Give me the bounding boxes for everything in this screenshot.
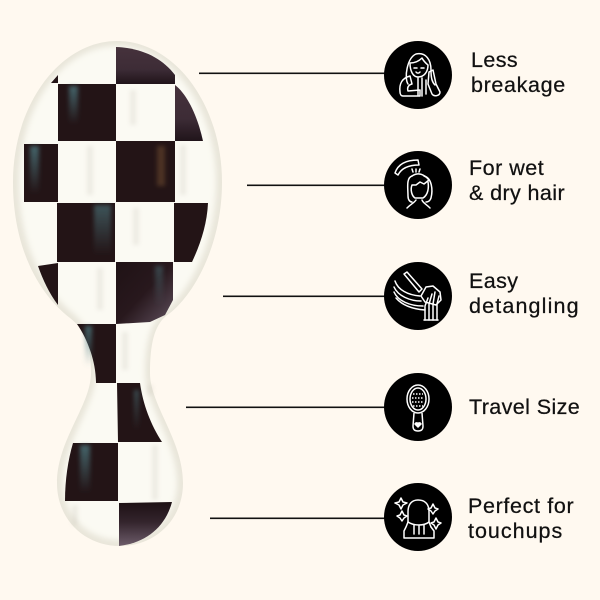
icon: woman brushing hair [384, 41, 452, 109]
connector line: wet and dry hair [247, 184, 386, 186]
label: Perfect for touchups: touchups [468, 519, 563, 543]
icon: shower over hair [384, 151, 452, 219]
connector line: travel size [186, 406, 386, 408]
icon: detangling hair [384, 262, 452, 330]
label: For wet & dry hair: For wet [469, 156, 544, 180]
hair brush illustration [13, 41, 222, 546]
label: Perfect for touchups: Perfect for [468, 494, 574, 518]
icon: small brush [384, 373, 452, 441]
label: Less breakage: breakage [471, 73, 566, 97]
icon: hair with sparkles [384, 483, 452, 551]
connector line: less breakage [199, 72, 386, 74]
label: Less breakage: Less [471, 48, 518, 72]
connector line: touchups [210, 518, 386, 519]
label: For wet & dry hair: & dry hair [469, 181, 565, 205]
label: Travel Size: Travel Size [469, 395, 580, 419]
label: Easy detangling: detangling [469, 294, 580, 318]
connector line: easy detangling [223, 296, 386, 297]
label: Easy detangling: Easy [469, 269, 518, 293]
